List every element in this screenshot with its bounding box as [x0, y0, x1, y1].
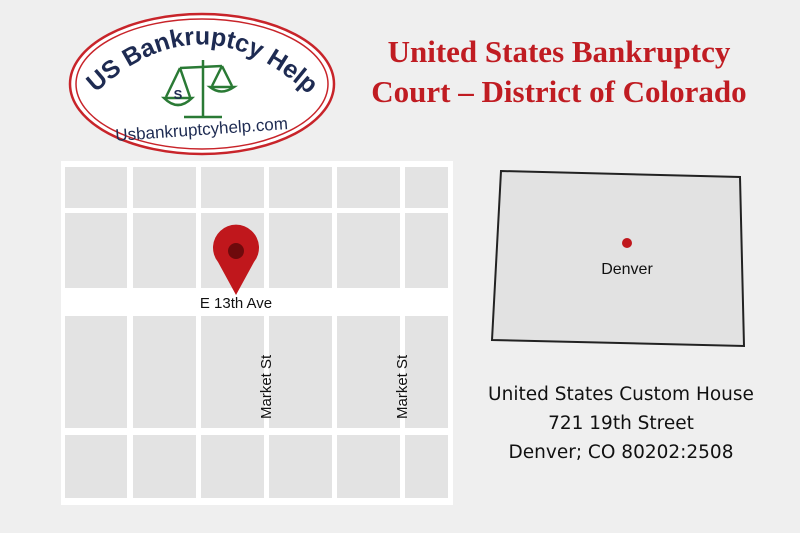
title: United States Bankruptcy	[388, 34, 730, 69]
logo	[68, 12, 336, 156]
colorado map: Denver	[601, 261, 653, 278]
logo: US Bankruptcy Help	[86, 29, 315, 92]
logo: Usbankruptcyhelp.com	[115, 114, 289, 145]
street label: Market St 2: Market St	[394, 354, 411, 419]
address: Denver; CO 80202:2508	[509, 442, 733, 463]
icon: map pin	[213, 225, 259, 295]
address	[488, 384, 754, 463]
logo: S	[174, 87, 183, 102]
street map	[61, 161, 453, 505]
title: Court – District of Colorado	[371, 74, 747, 109]
address: 721 19th Street	[548, 413, 694, 434]
address: United States Custom House	[488, 384, 754, 405]
street label: Market St: Market St	[258, 354, 275, 419]
colorado map	[490, 170, 745, 347]
title	[371, 34, 747, 109]
street label: E 13th Ave: E 13th Ave	[200, 295, 272, 312]
